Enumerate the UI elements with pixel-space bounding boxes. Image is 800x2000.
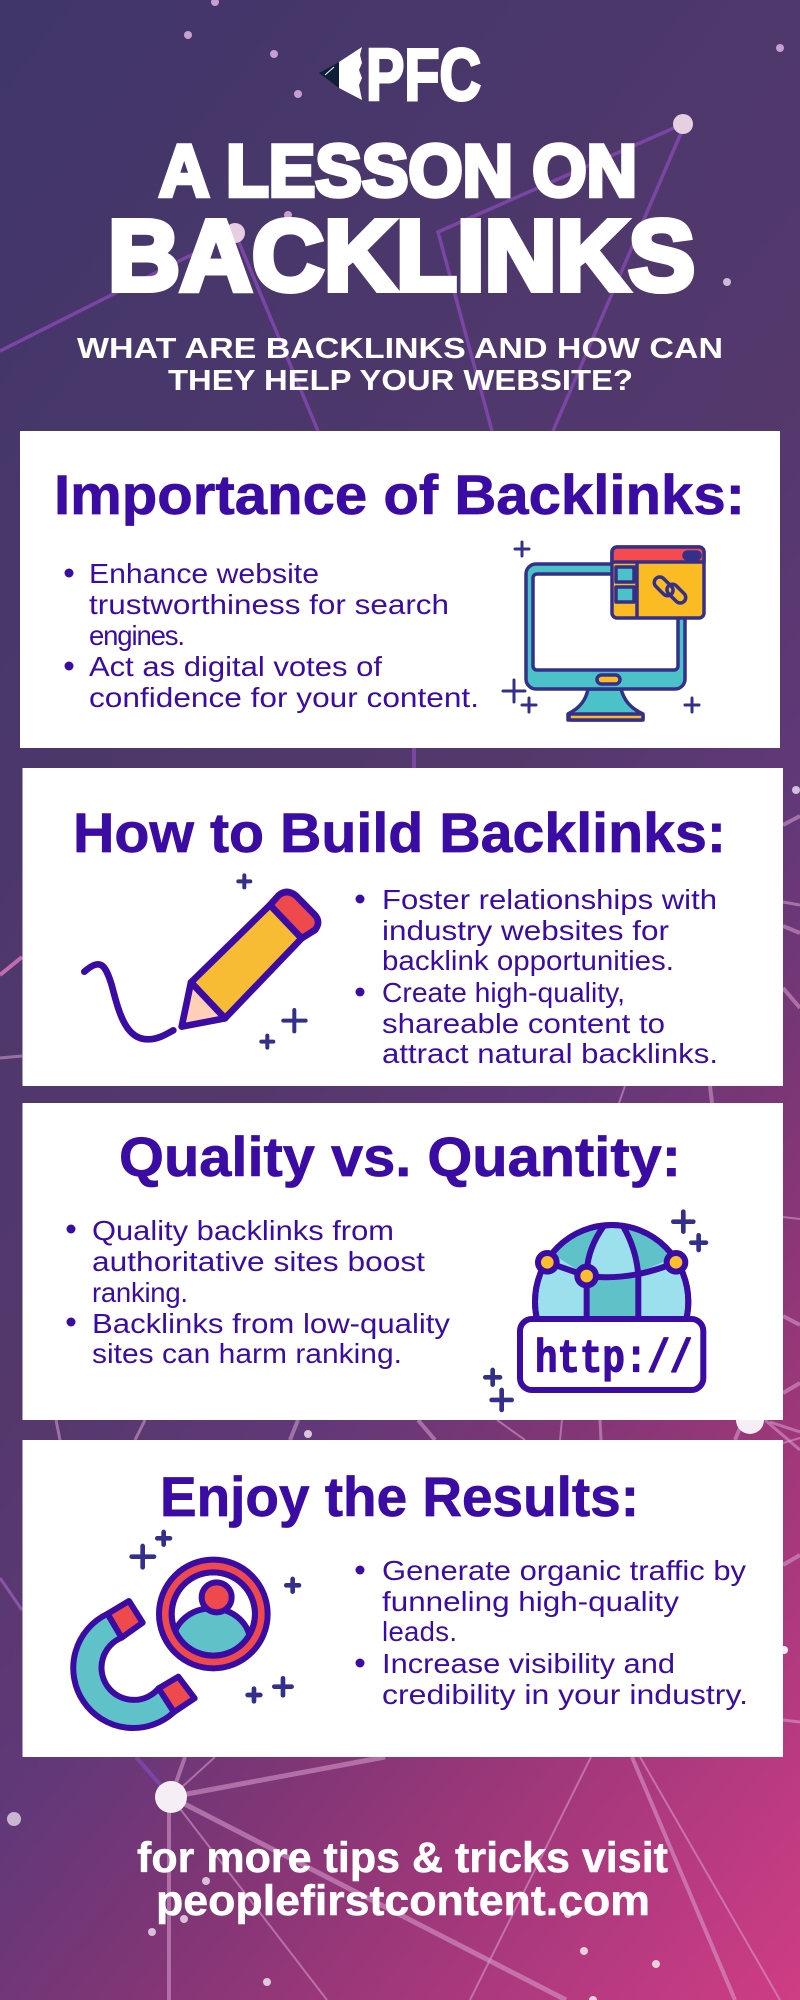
bullet list: how to build: shareable content to (382, 1008, 665, 1039)
bullet list: quality: Backlinks from low-quality (92, 1308, 450, 1339)
bullet list: quality: sites can harm ranking. (92, 1338, 402, 1369)
footer call to action (137, 1834, 668, 1925)
bullet list: how to build: Create high-quality, (382, 977, 625, 1008)
panel: enjoy the results (22, 1440, 783, 1757)
bullet list: quality: authoritative sites boost (92, 1246, 425, 1277)
footer call to action: peoplefirstcontent.com (156, 1877, 650, 1925)
bullet list: importance: Enhance website (89, 558, 319, 589)
bullet list: quality (66, 1215, 450, 1369)
bullet list: results: leads. (382, 1616, 457, 1647)
bullet list: quality: Quality backlinks from (92, 1215, 394, 1246)
background network: upper lines (0, 124, 683, 768)
panel: how to build backlinks (22, 768, 783, 1086)
bullet list: how to build: backlink opportunities. (382, 945, 674, 976)
icon: globe with http address bar: http:// (535, 1334, 692, 1387)
bullet list: importance: trustworthiness for search (89, 589, 449, 620)
title: BACKLINKS (108, 200, 695, 312)
logo: PFC (319, 35, 481, 116)
title (108, 131, 695, 312)
bullet list: results: Generate organic traffic by (382, 1555, 746, 1586)
bullet list: how to build: industry websites for (382, 915, 669, 946)
logo: PFC: PFC (366, 35, 481, 116)
heading: quality vs quantity: Quality vs. Quantity: (119, 1125, 681, 1188)
icon: globe with http address bar (485, 1212, 706, 1410)
panel: importance of backlinks (20, 431, 780, 748)
heading: enjoy the results: Enjoy the Results: (160, 1465, 639, 1528)
icon: pencil (84, 875, 318, 1048)
icon: magnet attracting person (73, 1532, 299, 1728)
bullet list: importance (64, 558, 479, 713)
panel: quality vs quantity (22, 1103, 783, 1420)
footer call to action: for more tips & tricks visit (137, 1834, 668, 1882)
bullet list: how to build (356, 884, 718, 1069)
bullet list: how to build: Foster relationships with (382, 884, 717, 915)
bullet list: quality: ranking. (92, 1277, 188, 1308)
subtitle: THEY HELP YOUR WEBSITE? (168, 365, 633, 397)
subtitle (77, 333, 723, 397)
heading: how to build: How to Build Backlinks: (73, 801, 726, 864)
bullet list: importance: confidence for your content. (89, 682, 479, 713)
bullet list: results: credibility in your industry. (382, 1679, 748, 1710)
bullet list: importance: engines. (89, 620, 185, 651)
title: A LESSON ON (159, 131, 637, 212)
heading: importance: Importance of Backlinks: (54, 463, 745, 526)
background network: middle and lower lines (0, 816, 800, 2000)
bullet list: results (356, 1555, 748, 1710)
bullet list: how to build: attract natural backlinks. (382, 1038, 718, 1069)
subtitle: WHAT ARE BACKLINKS AND HOW CAN (77, 333, 723, 365)
bullet list: results: Increase visibility and (382, 1648, 675, 1679)
bullet list: importance: Act as digital votes of (89, 651, 382, 682)
icon: monitor with link window (503, 542, 704, 720)
bullet list: results: funneling high-quality (382, 1586, 679, 1617)
